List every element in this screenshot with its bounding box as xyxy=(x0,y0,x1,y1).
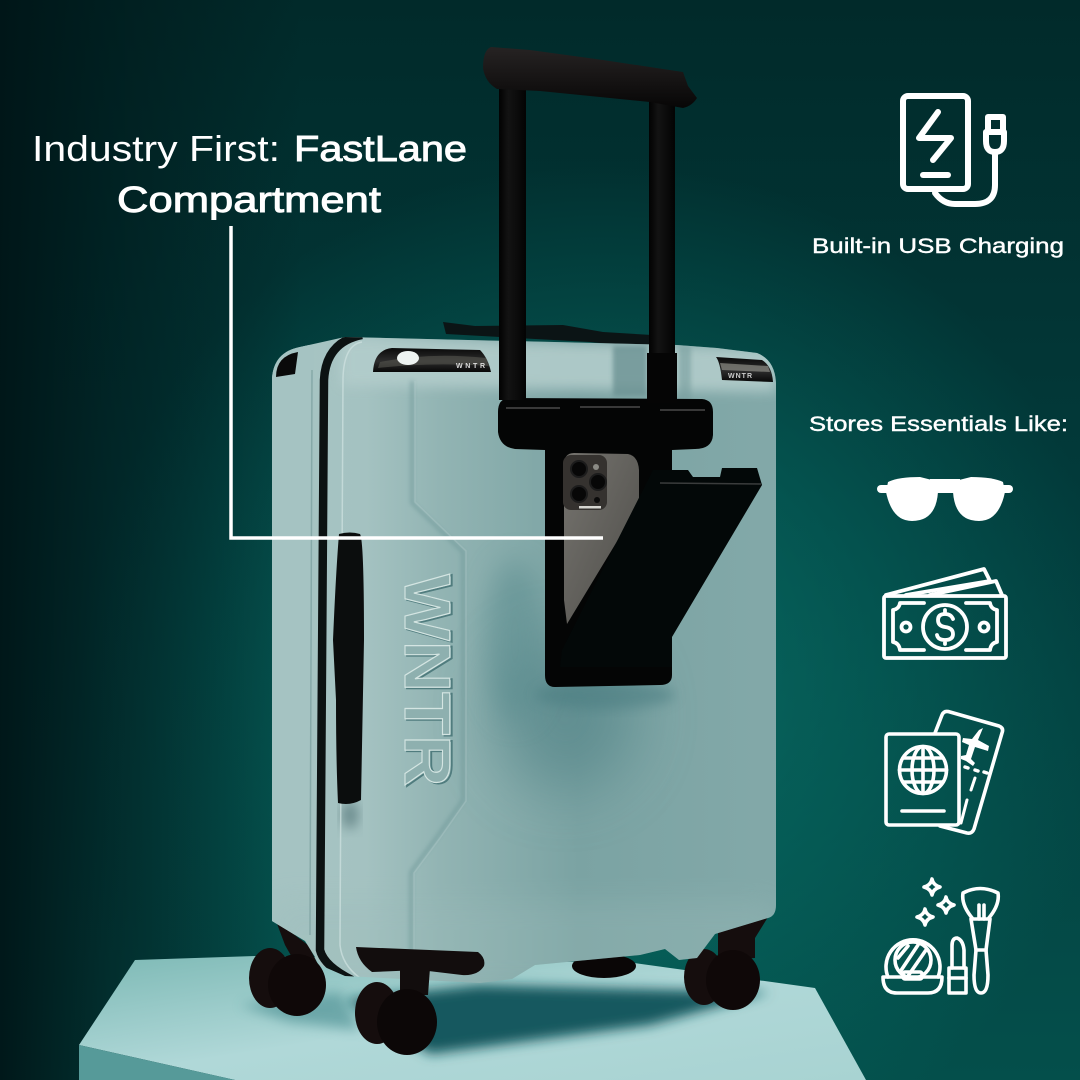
label: stores essentials: Stores Essentials Like: xyxy=(809,413,1068,436)
heading: FastLane xyxy=(294,128,467,169)
embossed brand lettering: WNTR xyxy=(393,575,465,787)
open compartment door xyxy=(560,468,762,667)
left corner trim xyxy=(276,352,298,377)
icon: banknotes xyxy=(884,569,1006,658)
suitcase shell xyxy=(260,325,790,995)
front wheels xyxy=(355,947,484,1055)
embossed brand lettering: WNTR xyxy=(391,574,463,786)
left rear wheels xyxy=(249,921,326,1016)
brush xyxy=(963,888,998,993)
platform xyxy=(79,956,866,1080)
heading: Industry First: xyxy=(32,128,280,169)
chrome corner trim: WNTR xyxy=(456,363,485,370)
telescopic handle xyxy=(483,47,697,403)
handle tubes xyxy=(499,88,677,403)
callout line xyxy=(231,226,603,538)
suitcase xyxy=(260,325,790,995)
ticket xyxy=(935,711,1003,833)
icon: makeup xyxy=(883,879,998,993)
heading: Compartment xyxy=(117,179,381,220)
zipper xyxy=(320,335,362,980)
wheel housing xyxy=(356,947,484,975)
shell seams xyxy=(310,370,312,935)
phone body xyxy=(564,453,639,624)
phone xyxy=(563,453,639,624)
heading xyxy=(32,128,467,220)
icon: sunglasses xyxy=(877,477,1013,521)
rear wheel xyxy=(572,954,636,978)
compact xyxy=(883,940,942,993)
sparkles xyxy=(917,879,954,925)
embossed ridge xyxy=(411,381,463,952)
handle base highlights xyxy=(506,407,705,410)
label: USB charging: Built-in USB Charging xyxy=(812,235,1064,258)
side handle xyxy=(333,532,364,804)
passport xyxy=(886,734,959,825)
icon: power bank xyxy=(903,96,1004,204)
icon: passport and ticket xyxy=(886,711,1003,833)
lipstick xyxy=(949,938,966,993)
handle base and compartment frame xyxy=(498,398,713,687)
camera module xyxy=(563,455,607,510)
chrome corner trim xyxy=(373,348,491,372)
top carry strap xyxy=(443,322,652,348)
right corner trim xyxy=(716,357,773,382)
right corner trim: WNTR xyxy=(728,373,752,380)
right wheels xyxy=(684,917,768,1010)
handle grip xyxy=(483,47,697,108)
